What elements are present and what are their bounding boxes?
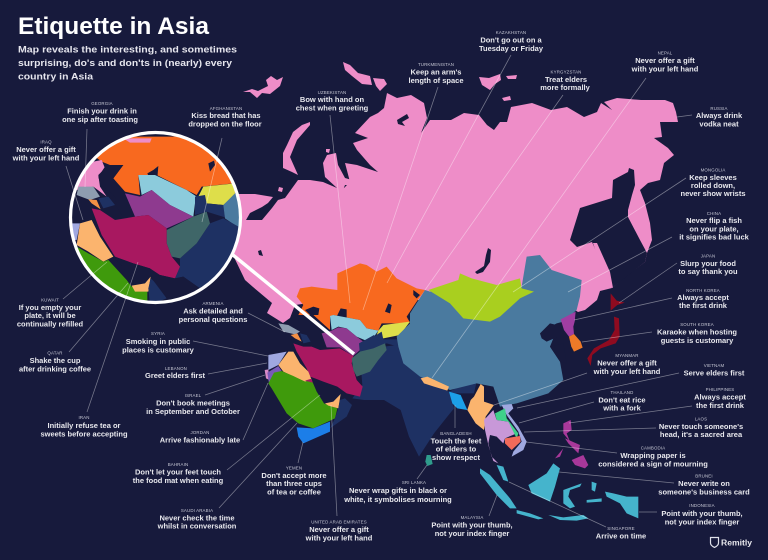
callout: China: Never flip a fish bbox=[686, 216, 742, 225]
callout: Malaysia bbox=[431, 515, 513, 538]
subtitle: Map reveals the interesting, and sometimes bbox=[18, 44, 237, 56]
callout: Syria: places is customary bbox=[122, 346, 195, 354]
callout: Lebanon: LEBANON bbox=[165, 366, 187, 371]
callout: China: it signifies bad luck bbox=[679, 232, 750, 242]
Russia bbox=[232, 62, 678, 323]
callout: Bahrain: Don't let your feet touch bbox=[135, 468, 221, 476]
callout: South Korea: Karaoke when hosting bbox=[657, 328, 737, 336]
callout: Afghanistan: Kiss bread that has bbox=[191, 111, 261, 120]
callout: Turkmenistan: TURKMENISTAN bbox=[418, 62, 454, 67]
callout: Myanmar: with your left hand bbox=[593, 367, 661, 376]
Uzbekistan bbox=[330, 315, 378, 347]
callout: Lebanon bbox=[145, 366, 206, 380]
callout: Jordan bbox=[160, 430, 240, 444]
callout: Indonesia: INDONESIA bbox=[689, 503, 715, 508]
map of Asia bbox=[232, 62, 678, 521]
subtitle bbox=[18, 44, 237, 82]
callout: Saudi Arabia: whilst in conversation bbox=[157, 522, 237, 530]
Mongolia bbox=[428, 273, 534, 322]
Aral and Balkhash lakes bbox=[305, 290, 420, 318]
callout: Brunei: Never write on bbox=[678, 479, 730, 488]
callout: Iraq: IRAQ bbox=[40, 140, 52, 144]
callout: Bangladesh: Touch the feet bbox=[431, 436, 482, 446]
inset magnifier circle bbox=[70, 132, 242, 305]
callout: Cambodia: Wrapping paper is bbox=[620, 451, 686, 460]
callout: Armenia: Ask detailed and bbox=[183, 306, 243, 316]
Oman bbox=[330, 398, 352, 428]
callout: Mongolia bbox=[680, 168, 746, 198]
callout: Russia: Always drink bbox=[696, 111, 743, 120]
callout: Laos: LAOS bbox=[695, 416, 707, 422]
callout: Cambodia: CAMBODIA bbox=[641, 446, 665, 450]
callout: Thailand: Don't eat rice bbox=[598, 396, 646, 404]
callout: Kazakhstan bbox=[479, 30, 544, 53]
callout: Kazakhstan: Tuesday or Friday bbox=[479, 44, 544, 53]
Afghanistan bbox=[352, 343, 387, 377]
callout: Iran: IRAN bbox=[78, 415, 90, 420]
inset Pakistan and India bbox=[175, 218, 240, 288]
callout: Indonesia bbox=[661, 503, 743, 526]
callout: Turkmenistan bbox=[408, 62, 464, 85]
callout: Laos: Never touch someone's bbox=[659, 422, 743, 431]
Indonesia and Malaysia bbox=[480, 463, 638, 521]
callout: Nepal: NEPAL bbox=[658, 50, 673, 56]
inset Uzbekistan bbox=[138, 175, 196, 216]
callout: Jordan: JORDAN bbox=[191, 430, 209, 435]
callout: Georgia: Finish your drink in bbox=[67, 106, 137, 116]
callout: Armenia: ARMENIA bbox=[202, 301, 224, 306]
callout: Kyrgyzstan: KYRGYZSTAN bbox=[551, 70, 581, 74]
callout: Myanmar bbox=[593, 353, 661, 376]
Philippines bbox=[555, 420, 588, 468]
East and South-East Asia bbox=[397, 255, 582, 407]
Jordan bbox=[267, 366, 282, 383]
callout: Iraq bbox=[12, 140, 80, 162]
inset United Arab Emirates bbox=[132, 277, 151, 292]
callout: Philippines bbox=[694, 387, 746, 410]
callout: Georgia: GEORGIA bbox=[91, 101, 113, 106]
callout: Brunei: BRUNEI bbox=[695, 474, 713, 478]
callout: Brunei bbox=[658, 474, 750, 496]
callout: Malaysia: MALAYSIA bbox=[461, 515, 483, 520]
callout: Yemen: YEMEN bbox=[286, 466, 302, 470]
pink strip beside Okhotsk sea bbox=[593, 243, 613, 288]
title: Etiquette in Asia bbox=[18, 14, 210, 40]
callout: Nepal: Never offer a gift bbox=[635, 56, 695, 65]
Caspian Sea bbox=[298, 315, 330, 352]
callout: Lebanon: Greet elders first bbox=[145, 371, 206, 380]
inset Kazakhstan bbox=[95, 137, 233, 195]
callout: Uzbekistan bbox=[296, 90, 369, 112]
callout: Israel: ISRAEL bbox=[185, 393, 202, 398]
Central Asia and Middle East bbox=[278, 315, 410, 356]
callout: Mongolia: Keep sleeves bbox=[689, 173, 737, 182]
Cambodia bbox=[505, 436, 521, 450]
callout: Bangladesh: of elders to bbox=[436, 444, 477, 454]
callout: Malaysia: not your index finger bbox=[435, 529, 509, 538]
callout: Thailand: with a fork bbox=[602, 404, 642, 412]
inset Iran bbox=[92, 208, 180, 278]
callout: Iraq: with your left hand bbox=[12, 154, 80, 162]
callout: South Korea: guests is customary bbox=[661, 336, 734, 345]
callout: Kyrgyzstan: more formally bbox=[540, 83, 591, 92]
pointer bar from inset to map bbox=[233, 255, 354, 354]
callout: Uzbekistan: Bow with hand on bbox=[300, 95, 364, 104]
China bbox=[397, 255, 582, 407]
subtitle: surprising, do's and don'ts in (nearly) every bbox=[18, 58, 233, 69]
callout: Armenia: personal questions bbox=[179, 315, 247, 324]
callout: Indonesia: Point with your thumb, bbox=[661, 509, 743, 518]
South Asia navy mass bbox=[352, 335, 477, 457]
callout: Kuwait: If you empty your bbox=[19, 303, 81, 312]
callout: South Korea bbox=[657, 322, 737, 345]
Yemen bbox=[297, 422, 330, 443]
Sri Lanka bbox=[425, 455, 433, 466]
inset Syria bbox=[72, 223, 80, 240]
callout: Iran: sweets before accepting bbox=[40, 430, 128, 438]
callout: Armenia bbox=[179, 301, 247, 324]
callout: Nepal bbox=[631, 50, 699, 74]
inset Kyrgyzstan bbox=[198, 183, 235, 205]
callout: Bahrain: BAHRAIN bbox=[168, 462, 188, 467]
callout: Kuwait bbox=[17, 298, 84, 328]
inset Caspian bbox=[98, 165, 124, 181]
callout: Japan: to say thank you bbox=[678, 267, 738, 276]
callout: Georgia: one sip after toasting bbox=[62, 115, 138, 124]
callout: Thailand: THAILAND bbox=[611, 390, 633, 395]
callout: Singapore: Arrive on time bbox=[596, 532, 646, 540]
Remitly logo: Remitly bbox=[721, 538, 752, 548]
inset Gulf bbox=[124, 260, 150, 268]
leader lines bbox=[63, 55, 692, 527]
callout: Qatar: Shake the cup bbox=[30, 356, 81, 365]
callout: Bahrain bbox=[133, 462, 224, 485]
Okhotsk sea, Baikal and other inland waters bbox=[258, 114, 647, 288]
callout: Vietnam: Serve elders first bbox=[684, 368, 745, 378]
callout: Qatar bbox=[19, 350, 91, 374]
callout: Sri Lanka: SRI LANKA bbox=[402, 480, 426, 485]
Bangladesh bbox=[449, 392, 467, 410]
callout: Brunei: someone's business card bbox=[658, 488, 750, 496]
callout: Sri Lanka: white, it symbolises mourning bbox=[343, 495, 452, 504]
callout: North Korea: NORTH KOREA bbox=[686, 288, 720, 293]
callout: Philippines: Always accept bbox=[694, 392, 746, 402]
callout: United Arab Emirates bbox=[305, 520, 373, 542]
callout: Bangladesh: show respect bbox=[432, 453, 480, 462]
callout: Kuwait: KUWAIT bbox=[41, 298, 59, 302]
callout: Russia: vodka neat bbox=[699, 120, 739, 128]
callout: Japan bbox=[678, 254, 738, 276]
callout: Kazakhstan: KAZAKHSTAN bbox=[496, 30, 526, 35]
Turkmenistan bbox=[322, 327, 369, 356]
callout: Japan: Slurp your food bbox=[680, 259, 736, 268]
callout: Laos bbox=[659, 416, 743, 439]
inset China bbox=[223, 194, 239, 226]
callout: Kazakhstan: Don't go out on a bbox=[480, 36, 543, 44]
callout: Vietnam bbox=[684, 363, 745, 378]
callout: Yemen: Don't accept more bbox=[261, 471, 327, 480]
inset Turkmenistan bbox=[125, 190, 193, 228]
callout: Israel: Don't book meetings bbox=[156, 398, 230, 408]
callout: Israel: in September and October bbox=[146, 407, 240, 416]
Iraq bbox=[278, 352, 312, 382]
Laos bbox=[495, 408, 518, 438]
callout: Yemen: than three cups bbox=[266, 479, 322, 488]
Vietnam bbox=[502, 404, 527, 457]
callout: Yemen bbox=[261, 466, 327, 496]
callout: Bangladesh bbox=[431, 431, 482, 462]
Bohai sea bbox=[540, 323, 558, 342]
Tajikistan bbox=[373, 332, 398, 347]
callout: Nepal: with your left hand bbox=[631, 64, 699, 74]
callout: Georgia bbox=[62, 101, 138, 124]
callout: Singapore: SINGAPORE bbox=[607, 526, 635, 531]
subtitle: country in Asia bbox=[18, 72, 94, 82]
callout: South Korea: SOUTH KOREA bbox=[680, 322, 714, 327]
inset Oman bbox=[148, 278, 166, 301]
callout: Kuwait: continually refilled bbox=[17, 320, 84, 328]
Syria bbox=[268, 352, 287, 370]
callout: Saudi Arabia bbox=[157, 508, 237, 530]
Lebanon and Israel bbox=[265, 369, 269, 380]
callout: Sri Lanka bbox=[343, 480, 452, 504]
South Korea bbox=[569, 334, 583, 352]
callout: Syria: Smoking in public bbox=[126, 337, 190, 346]
callout: Israel bbox=[146, 393, 240, 416]
callout: Bangladesh: BANGLADESH bbox=[440, 431, 472, 436]
callout: Philippines: PHILIPPINES bbox=[706, 387, 734, 392]
callout: Syria bbox=[122, 331, 195, 354]
callout: Malaysia: Point with your thumb, bbox=[431, 520, 513, 530]
inset Armenia bbox=[88, 199, 101, 209]
callout: Yemen: of tea or coffee bbox=[267, 488, 321, 496]
callout: Bahrain: the food mat when eating bbox=[133, 476, 224, 485]
United Arab Emirates bbox=[325, 394, 341, 408]
Georgia bbox=[278, 323, 300, 334]
callout: Sri Lanka: Never wrap gifts in black or bbox=[349, 486, 447, 495]
Kazakhstan bbox=[297, 263, 425, 331]
callout: Mongolia: rolled down, bbox=[691, 181, 735, 190]
callout: Myanmar: Never offer a gift bbox=[597, 358, 657, 368]
callout: Iran bbox=[40, 415, 128, 438]
callout: Vietnam: VIETNAM bbox=[704, 363, 724, 368]
callout: Kuwait: plate, it will be bbox=[24, 311, 76, 320]
callout: Iraq: Never offer a gift bbox=[16, 145, 76, 154]
callout: United Arab Emirates: with your left hand bbox=[305, 534, 373, 542]
callout: Turkmenistan: length of space bbox=[408, 76, 464, 85]
callout: Qatar: QATAR bbox=[47, 350, 63, 356]
callout: Philippines: the first drink bbox=[696, 401, 745, 410]
callout: Kyrgyzstan: Treat elders bbox=[545, 75, 587, 84]
inset Azerbaijan bbox=[98, 197, 115, 208]
Saudi Arabia bbox=[268, 371, 337, 428]
inset Saudi Arabia bbox=[78, 247, 148, 300]
inset Tajikistan bbox=[195, 195, 225, 217]
callout: China: on your plate, bbox=[689, 224, 739, 234]
callout: Thailand bbox=[598, 390, 646, 412]
callout: Turkmenistan: Keep an arm's bbox=[411, 68, 461, 76]
Thailand bbox=[484, 410, 517, 463]
inset Iraq bbox=[77, 220, 113, 262]
callout: Singapore bbox=[596, 526, 646, 540]
callout: Uzbekistan: chest when greeting bbox=[296, 104, 369, 112]
callout: Afghanistan: dropped on the floor bbox=[188, 120, 262, 128]
callout: North Korea bbox=[677, 288, 729, 310]
callout: Laos: head, it's a sacred area bbox=[660, 430, 743, 439]
callout: Qatar: after drinking coffee bbox=[19, 364, 91, 374]
inset Arabian Sea bbox=[154, 275, 200, 298]
callout: North Korea: the first drink bbox=[679, 301, 728, 310]
icon: shield bbox=[710, 538, 718, 547]
callout: Cambodia: considered a sign of mourning bbox=[598, 460, 708, 468]
Iran bbox=[293, 343, 363, 397]
callout: Saudi Arabia: SAUDI ARABIA bbox=[181, 508, 213, 513]
inset Afghanistan bbox=[167, 212, 210, 258]
callout: Cambodia bbox=[598, 446, 708, 468]
callout: Myanmar: MYANMAR bbox=[615, 353, 639, 358]
callout: Uzbekistan: UZBEKISTAN bbox=[318, 90, 346, 95]
callout: Indonesia: not your index finger bbox=[665, 518, 739, 526]
Azerbaijan bbox=[300, 333, 311, 343]
callout: Russia: RUSSIA bbox=[710, 106, 728, 111]
callout: United Arab Emirates: Never offer a gift bbox=[309, 525, 369, 534]
callout: Japan: JAPAN bbox=[701, 254, 715, 258]
callout: Afghanistan: AFGHANISTAN bbox=[210, 106, 242, 111]
callout: China bbox=[679, 211, 750, 242]
North Korea bbox=[561, 312, 576, 337]
callout: China: CHINA bbox=[707, 211, 721, 216]
callout: North Korea: Always accept bbox=[677, 293, 729, 302]
callout: United Arab Emirates: UNITED ARAB EMIRATES bbox=[311, 520, 367, 524]
Kuwait bbox=[305, 379, 313, 383]
callout: Russia bbox=[696, 106, 743, 128]
Kyrgyzstan bbox=[377, 322, 410, 338]
callout: Mongolia: never show wrists bbox=[680, 189, 746, 198]
callout: Iran: Initially refuse tea or bbox=[48, 421, 121, 430]
Armenia bbox=[291, 333, 302, 342]
Japan bbox=[587, 293, 625, 366]
callout: Saudi Arabia: Never check the time bbox=[159, 514, 235, 522]
Nepal bbox=[421, 377, 449, 391]
callout: Mongolia: MONGOLIA bbox=[701, 168, 725, 172]
callout: Syria: SYRIA bbox=[151, 331, 165, 336]
inset Georgia bbox=[77, 187, 100, 200]
inset Russia bbox=[77, 160, 107, 197]
Myanmar bbox=[467, 384, 494, 430]
callout: Afghanistan bbox=[188, 106, 262, 128]
callout: Kyrgyzstan bbox=[540, 70, 591, 92]
callout: Jordan: Arrive fashionably late bbox=[160, 436, 240, 444]
